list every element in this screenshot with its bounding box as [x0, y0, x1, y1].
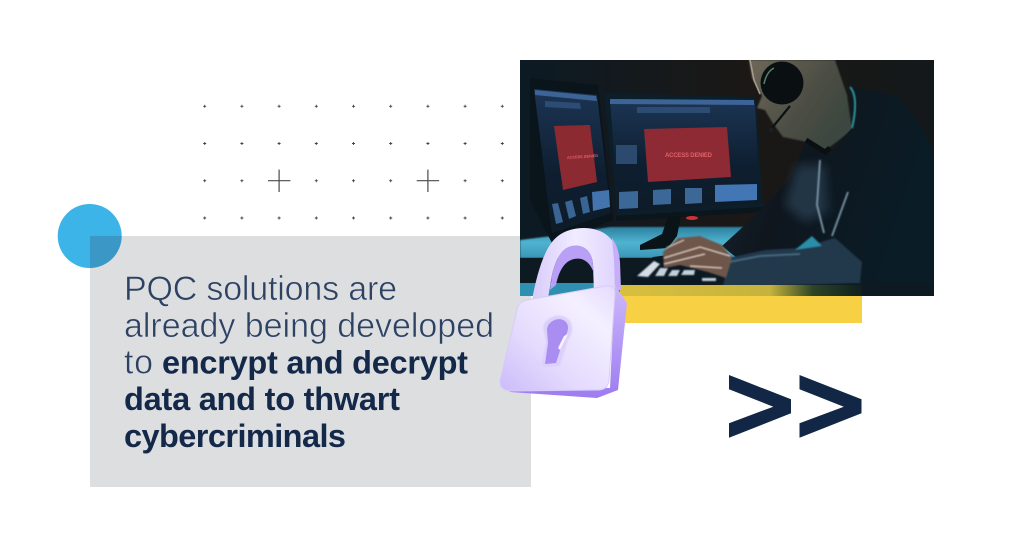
light text lines: PQC solutions are: [124, 270, 397, 308]
circle overlap with panel: [90, 236, 122, 268]
dot grid pattern: [203, 105, 504, 220]
bold text lines: encrypt and decrypt: [162, 344, 468, 380]
left monitor: ACCESS DENIED: [567, 154, 598, 160]
padlock side: [505, 285, 627, 398]
bold text lines: cybercriminals: [124, 418, 346, 454]
light text lines: already being developed: [124, 307, 494, 345]
padlock keyhole: [542, 316, 572, 367]
bold text lines: [124, 344, 468, 454]
monitor stand: [640, 216, 681, 250]
left monitor: [530, 78, 613, 243]
padlock shackle: [532, 228, 621, 300]
photo: hacker at monitors: [520, 60, 934, 296]
desk: [520, 227, 745, 296]
right monitor: [604, 93, 763, 221]
right monitor: ACCESS DENIED: [665, 153, 713, 159]
light text lines: to: [124, 344, 153, 382]
headline text: [124, 270, 494, 454]
man: hoodie and arm: [718, 86, 934, 285]
man: head and headset: [749, 60, 852, 150]
blue circle: [58, 204, 122, 268]
padlock front: [500, 286, 615, 391]
man: hand on keyboard: [663, 236, 732, 278]
keyboard: [630, 255, 716, 285]
light text lines: [124, 270, 494, 382]
grey text panel: [90, 236, 531, 487]
yellow block: [620, 283, 862, 323]
double chevron arrows: [729, 375, 862, 438]
bold text lines: data and to thwart: [124, 381, 400, 417]
tint on yellow strip: [620, 285, 862, 296]
padlock icon: [500, 228, 627, 398]
